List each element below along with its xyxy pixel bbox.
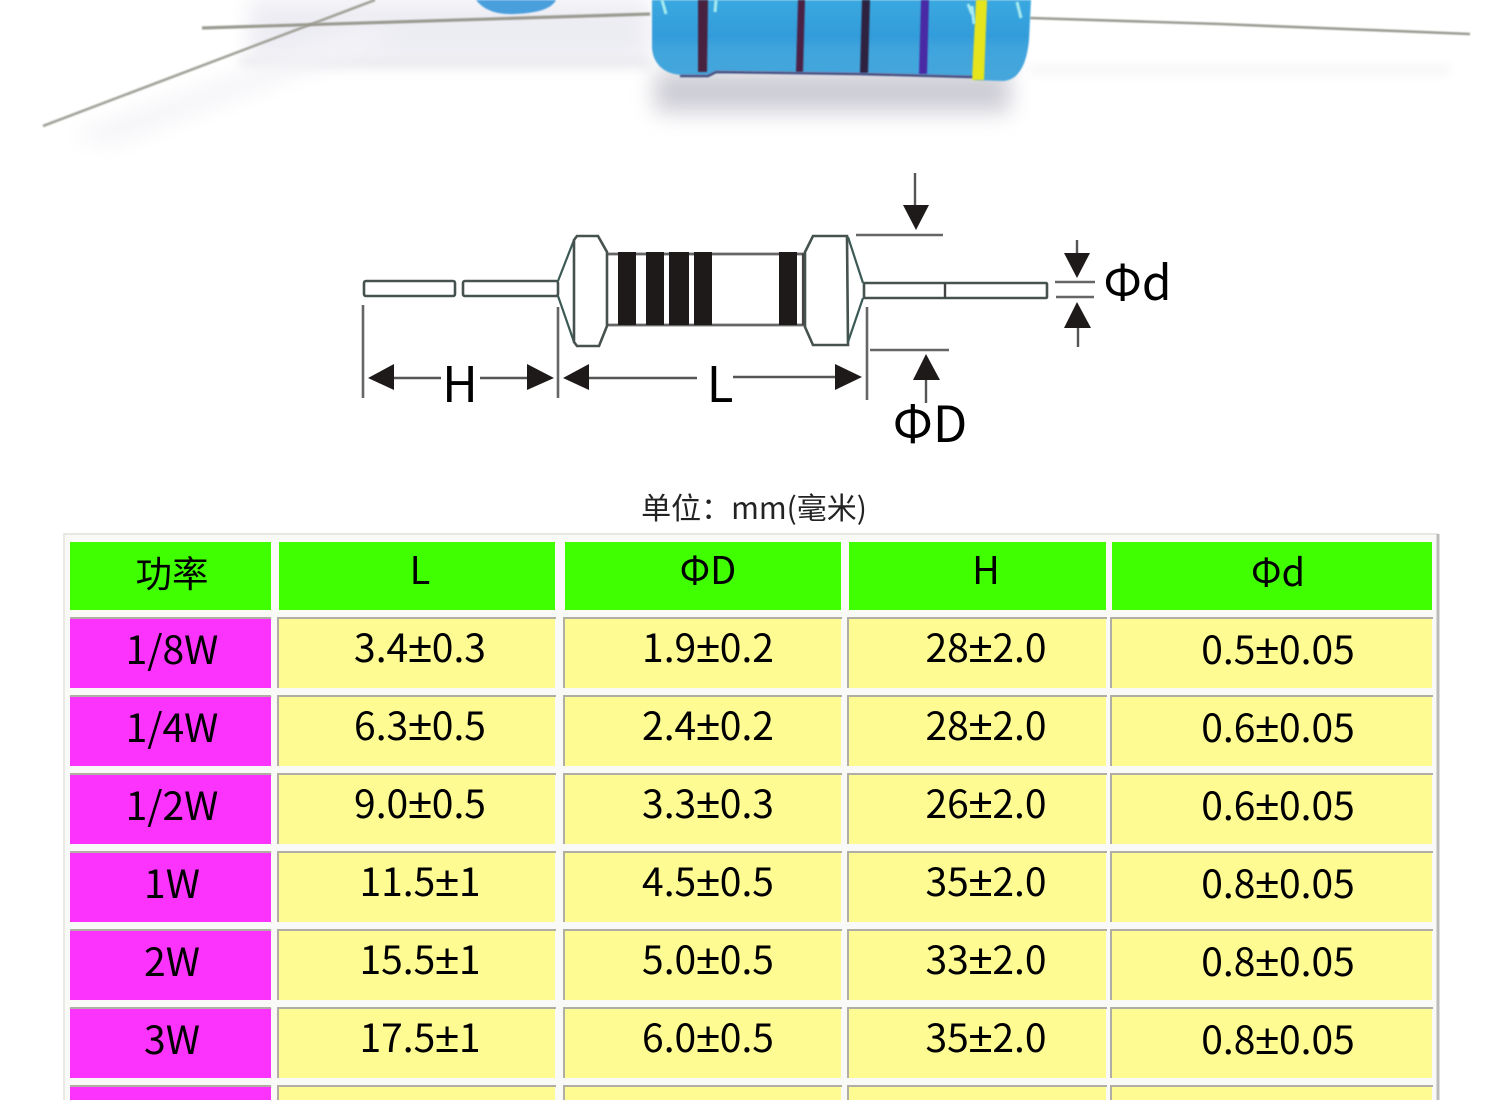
row: 1/2W	[126, 774, 1355, 832]
row: 1/4W: 6.3±0.5	[354, 696, 486, 752]
shadow under the wires	[70, 0, 1450, 145]
right lead wire	[1030, 18, 1470, 34]
row: 1/8W: 1.9±0.2	[642, 618, 774, 674]
colour band 3	[860, 0, 870, 73]
row: 1/4W: 0.6±0.05	[1201, 698, 1355, 754]
row: 1W: 0.8±0.05	[1201, 854, 1355, 910]
colour band 4	[919, 0, 929, 74]
extension lines	[363, 235, 1095, 400]
arrow: H	[368, 364, 554, 390]
diagonal wire	[43, 0, 375, 126]
shadow under the body	[655, 70, 1010, 112]
row: 2W	[144, 930, 1355, 988]
row: 1/2W: 9.0±0.5	[354, 774, 486, 830]
value cells	[279, 619, 1432, 1100]
unit note: 单位：mm(毫米)	[641, 484, 867, 528]
cell inner edges	[70, 617, 1433, 1100]
dimension diagram	[363, 173, 1172, 457]
dark bands	[618, 252, 797, 325]
row: 2W: 33±2.0	[925, 930, 1047, 986]
label phi D: ΦD	[893, 385, 967, 457]
header row: Φd	[1251, 542, 1305, 597]
row: 2W: 15.5±1	[359, 930, 481, 986]
row: 1/8W: 0.5±0.05	[1201, 620, 1355, 676]
header row	[70, 540, 1432, 610]
row: 1/2W: 1/2W	[126, 776, 218, 832]
second resistor, cropped at top	[476, 0, 556, 14]
header row: H	[972, 540, 1000, 595]
row: 1/4W: 28±2.0	[925, 696, 1047, 752]
label L: L	[707, 346, 733, 417]
row: 1/2W: 0.6±0.05	[1201, 776, 1355, 832]
row: 2W: 2W	[144, 932, 200, 988]
arrows: phi D	[903, 173, 940, 403]
colour band 5: yellow	[972, 0, 987, 80]
row: 2W: 5.0±0.5	[642, 930, 774, 986]
row: 1W: 35±2.0	[925, 852, 1047, 908]
first column cells	[70, 619, 271, 1100]
row: 1/8W	[126, 618, 1355, 676]
row: 1/2W: 26±2.0	[925, 774, 1047, 830]
row: 1/2W: 3.3±0.3	[642, 774, 774, 830]
row: 1/4W: 2.4±0.2	[642, 696, 774, 752]
right lead	[864, 283, 1047, 298]
header row: ΦD	[680, 540, 736, 595]
left lead	[364, 281, 558, 296]
colour band 2	[796, 0, 805, 72]
row: 3W: 35±2.0	[925, 1008, 1047, 1064]
arrows: phi d	[1064, 240, 1091, 347]
table	[63, 533, 1439, 1100]
table frame	[63, 533, 1439, 1100]
row: 1W: 1W	[144, 854, 200, 910]
row: 3W: 0.8±0.05	[1201, 1010, 1355, 1066]
row: 1W	[144, 852, 1355, 910]
resistor body	[652, 0, 1031, 81]
row: 1W: 4.5±0.5	[642, 852, 774, 908]
row: 1/4W: 1/4W	[126, 698, 218, 754]
row: 2W: 0.8±0.05	[1201, 932, 1355, 988]
left lead wire	[202, 14, 650, 28]
header row: L	[410, 540, 430, 595]
arrow: L	[563, 364, 862, 390]
colour band 1	[698, 0, 708, 72]
row: 1/8W: 3.4±0.3	[354, 618, 486, 674]
resistor outline	[558, 236, 863, 346]
row: 3W: 17.5±1	[359, 1008, 481, 1064]
photo: blue resistor	[43, 0, 1470, 145]
label H: H	[442, 346, 478, 417]
row: 1/8W: 28±2.0	[925, 618, 1047, 674]
row: 1/8W: 1/8W	[126, 620, 218, 676]
row: 1W: 11.5±1	[359, 852, 481, 908]
row: 3W: 3W	[144, 1010, 200, 1066]
label phi d: Φd	[1103, 244, 1172, 314]
header row: 功率	[136, 545, 208, 598]
highlights	[662, 0, 1021, 24]
row: 3W	[144, 1008, 1355, 1066]
row: 3W: 6.0±0.5	[642, 1008, 774, 1064]
row: 1/4W	[126, 696, 1355, 754]
body bottom edge	[680, 72, 972, 77]
